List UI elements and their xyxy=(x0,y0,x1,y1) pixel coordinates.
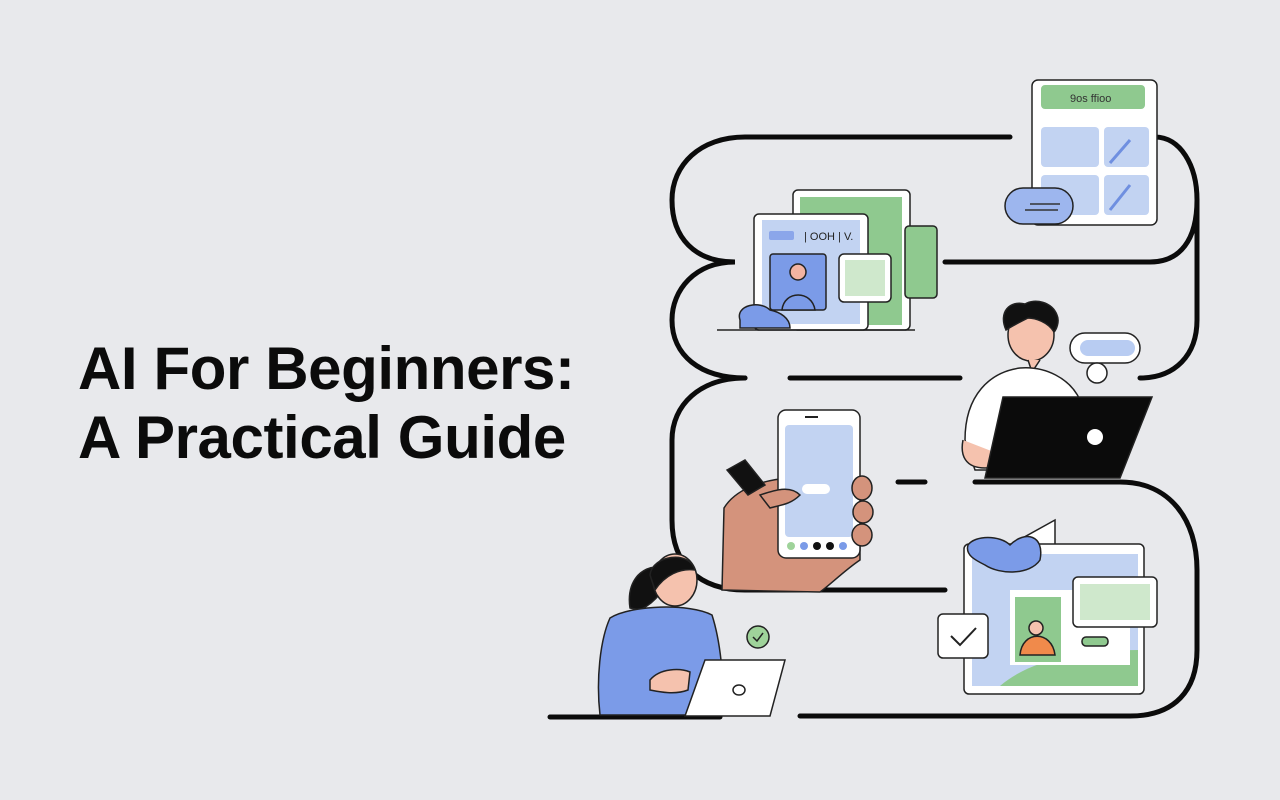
panel: browser window with video xyxy=(717,190,937,330)
title: A Practical Guide xyxy=(78,404,566,471)
title: AI For Beginners: xyxy=(78,335,575,402)
panel: bottom-right window with check xyxy=(938,520,1157,694)
title xyxy=(78,335,575,471)
panel: top-right dashboard xyxy=(1005,80,1157,225)
illustration: man with laptop xyxy=(962,301,1152,478)
panel: top-right dashboard: 9os ffioo xyxy=(1070,93,1111,105)
path: winding connector line xyxy=(550,137,1197,717)
illustration: woman with laptop xyxy=(598,554,785,716)
panel: browser window with video: | OOH | V. xyxy=(804,231,853,243)
illustration: hand holding phone xyxy=(722,410,873,592)
